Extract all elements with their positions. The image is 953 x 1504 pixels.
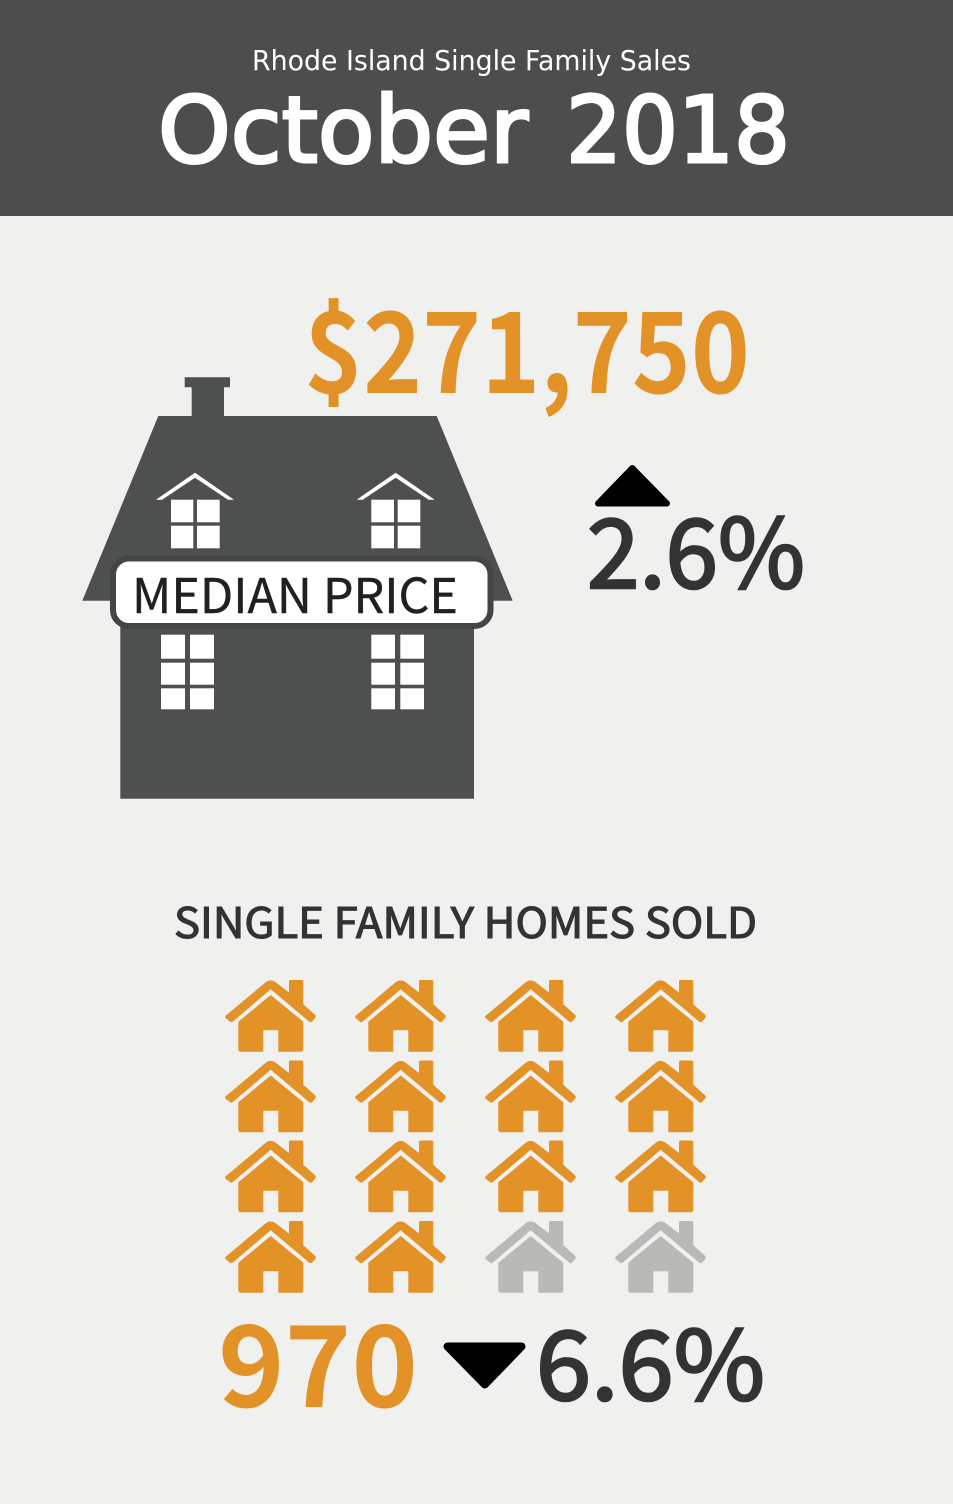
title: October bbox=[158, 77, 528, 184]
homes sold value: 970 bbox=[218, 1276, 418, 1440]
title: 2018 bbox=[566, 77, 790, 184]
arrow down bbox=[448, 1346, 522, 1384]
lower window left bbox=[161, 635, 214, 709]
homes sold change percent: 6.6% bbox=[536, 1289, 765, 1428]
gray houses bbox=[485, 1221, 706, 1293]
header banner bbox=[0, 0, 953, 216]
price change percent: 2.6% bbox=[587, 477, 805, 616]
arrow up bbox=[598, 468, 667, 504]
subtitle: Rhode Island Single Family Sales bbox=[252, 44, 691, 77]
median price value: $271,750 bbox=[304, 264, 750, 426]
orange houses bbox=[225, 980, 706, 1293]
median price sign: MEDIAN PRICE bbox=[132, 557, 458, 627]
house pictogram grid bbox=[225, 980, 706, 1293]
house body bbox=[120, 600, 474, 799]
dormer left bbox=[156, 473, 234, 548]
chimney bbox=[185, 377, 230, 420]
lower window right bbox=[371, 635, 424, 709]
title bbox=[158, 77, 790, 184]
homes sold heading: SINGLE FAMILY HOMES SOLD bbox=[174, 890, 757, 951]
dormer right bbox=[357, 473, 435, 548]
roof bbox=[82, 416, 513, 601]
icon: large house with median price sign bbox=[82, 377, 513, 799]
